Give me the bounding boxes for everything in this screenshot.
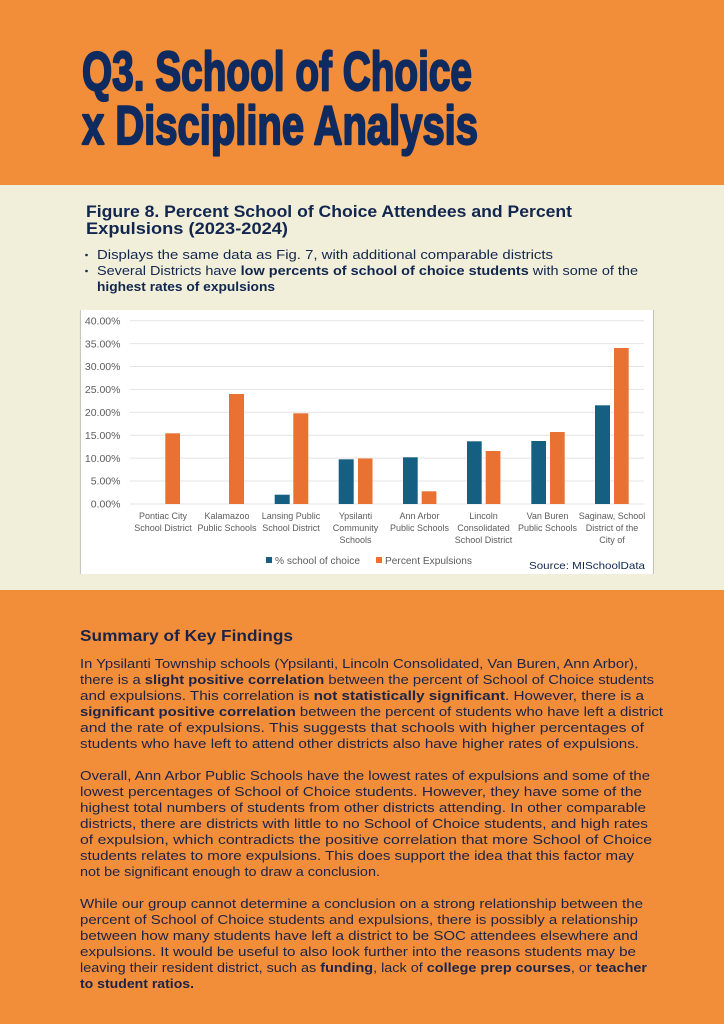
y axis labels: 20.00% (85, 407, 120, 419)
y axis labels (85, 315, 120, 511)
findings paragraph 3 (80, 896, 647, 991)
category labels: Community (333, 523, 379, 533)
findings paragraph 2: of expulsion, which contradicts the positive correlation that more School of Choice (80, 832, 652, 847)
category labels (134, 511, 645, 545)
category labels: Ann Arbor (399, 511, 440, 521)
findings paragraph 1: and the rate of expulsions. This suggests that schools with higher percentages of (80, 720, 644, 735)
y axis labels: 40.00% (85, 315, 120, 327)
figure heading (86, 203, 573, 238)
findings heading: Summary of Key Findings (80, 628, 293, 645)
legend: % school of choice (275, 555, 360, 567)
header band (0, 0, 724, 185)
findings paragraph 2: highest total numbers of students from other districts attending. In other comparable (80, 800, 646, 815)
findings paragraph 1: students who have left to attend other districts also have higher rates of expulsions. (80, 736, 639, 751)
findings paragraph 2: not be significant enough to draw a conclusion. (80, 864, 380, 879)
findings paragraph 3: to student ratios. (80, 976, 194, 991)
y axis labels: 5.00% (91, 476, 120, 488)
category labels: City of (599, 535, 625, 545)
source note: Source: MISchoolData (529, 560, 645, 572)
category labels: Public Schools (197, 523, 257, 533)
y axis gridlines (130, 321, 644, 504)
findings paragraph 1: there is a slight positive correlation between the percent of School of Choice students (80, 672, 655, 687)
title: x Discipline Analysis (82, 94, 478, 156)
y axis labels: 35.00% (85, 338, 120, 350)
category labels: Pontiac City (139, 511, 188, 521)
legend: Percent Expulsions (385, 555, 472, 567)
category labels: Van Buren (527, 511, 568, 521)
category labels: Saginaw, School (579, 511, 645, 521)
figure heading: Expulsions (2023-2024) (86, 220, 288, 238)
findings paragraph 3: leaving their resident district, such as funding , lack of college prep courses , or teacher (80, 960, 647, 975)
findings paragraph 3: While our group cannot determine a conclusion on a strong relationship between the (80, 896, 643, 911)
y axis labels: 15.00% (85, 430, 120, 442)
series: percent school of choice (275, 405, 610, 504)
findings paragraph 1: In Ypsilanti Township schools (Ypsilanti, Lincoln Consolidated, Van Buren, Ann Arbor), (80, 656, 638, 671)
figure bullet notes: Several Districts have low percents of school of choice students with some of the (97, 263, 638, 278)
category labels: Kalamazoo (204, 511, 250, 521)
figure section background (0, 185, 724, 590)
category labels: Ypsilanti (339, 511, 372, 521)
category labels: Schools (339, 535, 372, 545)
title: Q3. School of Choice (82, 40, 472, 102)
findings paragraph 2: districts, there are districts with little to no School of Choice students, and high rates (80, 816, 649, 831)
findings paragraph 3: between how many students have left a district to be SOC attendees elsewhere and (80, 928, 638, 943)
findings section background (0, 590, 724, 1024)
category labels: Public Schools (518, 523, 578, 533)
category labels: School District (134, 523, 192, 533)
findings paragraph 2: students relates to more expulsions. This does support the idea that this factor may (80, 848, 635, 863)
category labels: District of the (586, 523, 638, 533)
category labels: Consolidated (457, 523, 510, 533)
category labels: Public Schools (390, 523, 450, 533)
y axis labels: 10.00% (85, 453, 120, 465)
findings paragraph 2: Overall, Ann Arbor Public Schools have the lowest rates of expulsions and some of the (80, 768, 650, 783)
category labels: Lincoln (469, 511, 498, 521)
findings paragraph 1: and expulsions. This correlation is not statistically significant . However, there is a (80, 688, 645, 703)
figure bullet notes: highest rates of expulsions (97, 279, 275, 294)
y axis labels: 30.00% (85, 361, 120, 373)
figure bullet notes: Displays the same data as Fig. 7, with additional comparable districts (97, 247, 554, 262)
figure heading: Figure 8. Percent School of Choice Attendees and Percent (86, 203, 573, 221)
figure bullet notes (85, 247, 638, 294)
findings paragraph 1: significant positive correlation between the percent of students who have left a district (80, 704, 663, 719)
y axis labels: 0.00% (91, 499, 120, 511)
findings paragraph 2 (80, 768, 652, 879)
series: percent expulsions (165, 348, 629, 504)
legend (266, 555, 472, 567)
findings paragraph 1 (80, 656, 663, 751)
category labels: Lansing Public (262, 511, 321, 521)
category labels: School District (455, 535, 513, 545)
panel: bar chart (80, 310, 654, 574)
title (82, 40, 478, 156)
findings paragraph 3: expulsions. It would be useful to also look further into the reasons students may be (80, 944, 636, 959)
category labels: School District (262, 523, 320, 533)
findings paragraph 3: percent of School of Choice students and expulsions, there is possibly a relationship (80, 912, 638, 927)
findings paragraph 2: lowest percentages of School of Choice students. However, they have some of the (80, 784, 642, 799)
y axis labels: 25.00% (85, 384, 120, 396)
